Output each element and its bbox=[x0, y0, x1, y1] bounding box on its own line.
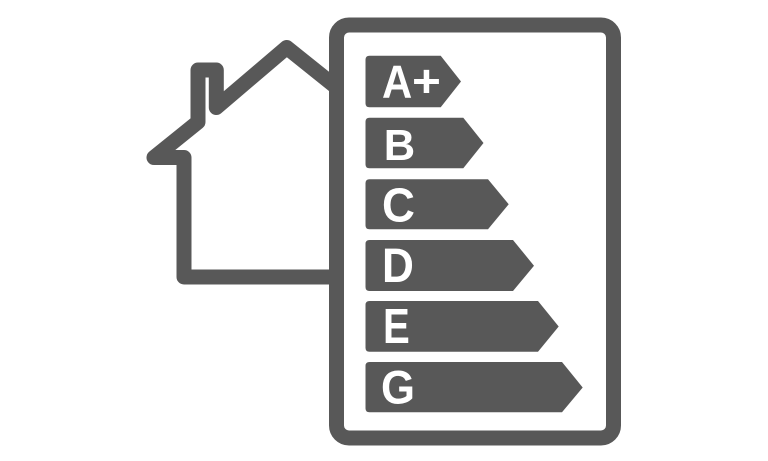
rating bar: A+ bbox=[366, 56, 461, 108]
icon: house outline bbox=[154, 48, 336, 277]
rating bar: A+: A bbox=[382, 57, 412, 108]
rating bar: G: G bbox=[381, 361, 415, 414]
rating bar: C: C bbox=[382, 178, 415, 232]
rating bar: E: E bbox=[383, 299, 410, 354]
rating bar: A+: + bbox=[412, 57, 441, 107]
rating bar: B bbox=[366, 118, 484, 170]
panel: energy label frame bbox=[336, 25, 614, 438]
rating bar: E bbox=[366, 299, 559, 354]
rating bar: C bbox=[366, 178, 509, 232]
rating bar: G bbox=[366, 361, 583, 414]
rating bar: B: B bbox=[384, 122, 415, 170]
rating bar: D: D bbox=[382, 238, 414, 292]
rating bar: D bbox=[366, 238, 534, 292]
